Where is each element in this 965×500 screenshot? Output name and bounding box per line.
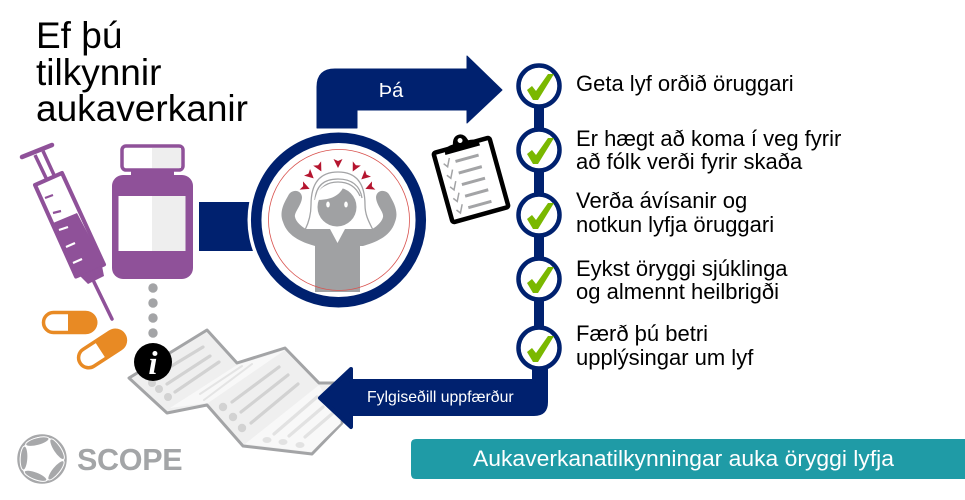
icon: information badge	[134, 343, 172, 382]
pain arrows	[300, 159, 375, 193]
banner	[411, 439, 965, 479]
icon: capsule tilted	[74, 325, 130, 373]
logo: SCOPE: SCOPE	[77, 443, 182, 477]
icon: clipboard checklist	[430, 127, 509, 222]
step 4: og almennt heilbrigði	[576, 279, 779, 304]
step 2	[518, 126, 841, 174]
dotted connector	[148, 283, 158, 338]
arrow: leaflet updated: Fylgiseðill uppfærður	[367, 389, 514, 406]
banner: Aukaverkanatilkynningar auka öryggi lyfja	[473, 446, 895, 471]
icon: capsule horizontal	[44, 311, 98, 334]
timeline spine	[534, 86, 544, 371]
step 2: Er hægt að koma í veg fyrir	[576, 126, 841, 151]
arrow: leaflet updated	[320, 365, 546, 427]
step 3	[518, 188, 774, 237]
icon: syringe	[22, 145, 112, 319]
step 2: að fólk verði fyrir skaða	[576, 149, 803, 174]
title: aukaverkanir	[36, 88, 248, 129]
title: tilkynnir	[36, 52, 161, 93]
step 1: Geta lyf orðið öruggari	[576, 71, 794, 96]
title: Ef þú	[36, 15, 122, 56]
step 4: Eykst öryggi sjúklinga	[576, 256, 788, 281]
arrow: then: Þá	[379, 80, 404, 102]
step 4	[518, 256, 788, 304]
step 5	[518, 321, 754, 370]
step 5: Færð þú betri	[576, 321, 708, 346]
icon: folded leaflet	[129, 330, 346, 454]
step 5: upplýsingar um lyf	[576, 345, 754, 370]
title	[36, 15, 248, 129]
person figure	[282, 172, 396, 292]
step 3: Verða ávísanir og	[576, 188, 747, 213]
logo: SCOPE	[18, 435, 182, 484]
connector block	[199, 202, 253, 251]
person with headache in circle	[248, 129, 430, 311]
icon: medicine bottle	[112, 146, 193, 279]
icon: information badge: i	[148, 346, 158, 382]
arrow: then	[317, 56, 502, 128]
step 3: notkun lyfja öruggari	[576, 212, 774, 237]
step 1	[518, 66, 794, 106]
